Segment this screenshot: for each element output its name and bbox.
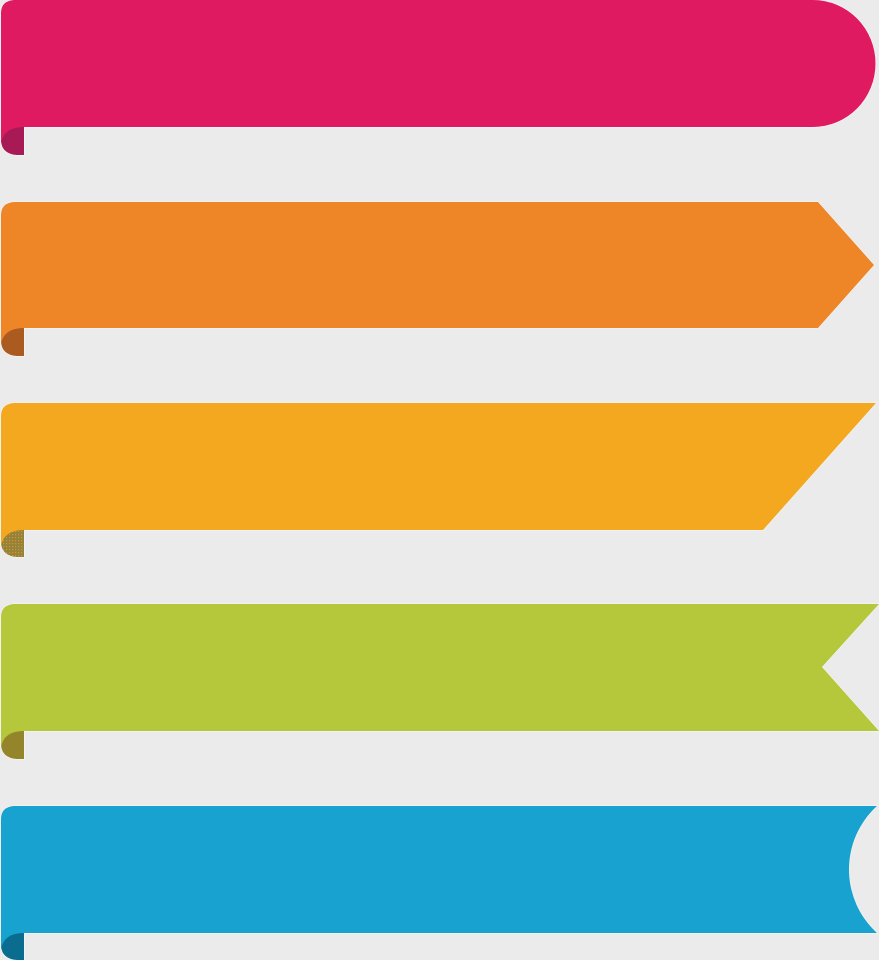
ribbon 5: blue concave end	[1, 806, 877, 960]
ribbon 4: green notched end	[1, 604, 879, 759]
ribbon 2: orange arrow end	[1, 202, 874, 356]
ribbon 3: amber slanted end	[1, 403, 876, 557]
ribbon 1: pink rounded end	[1, 0, 876, 155]
